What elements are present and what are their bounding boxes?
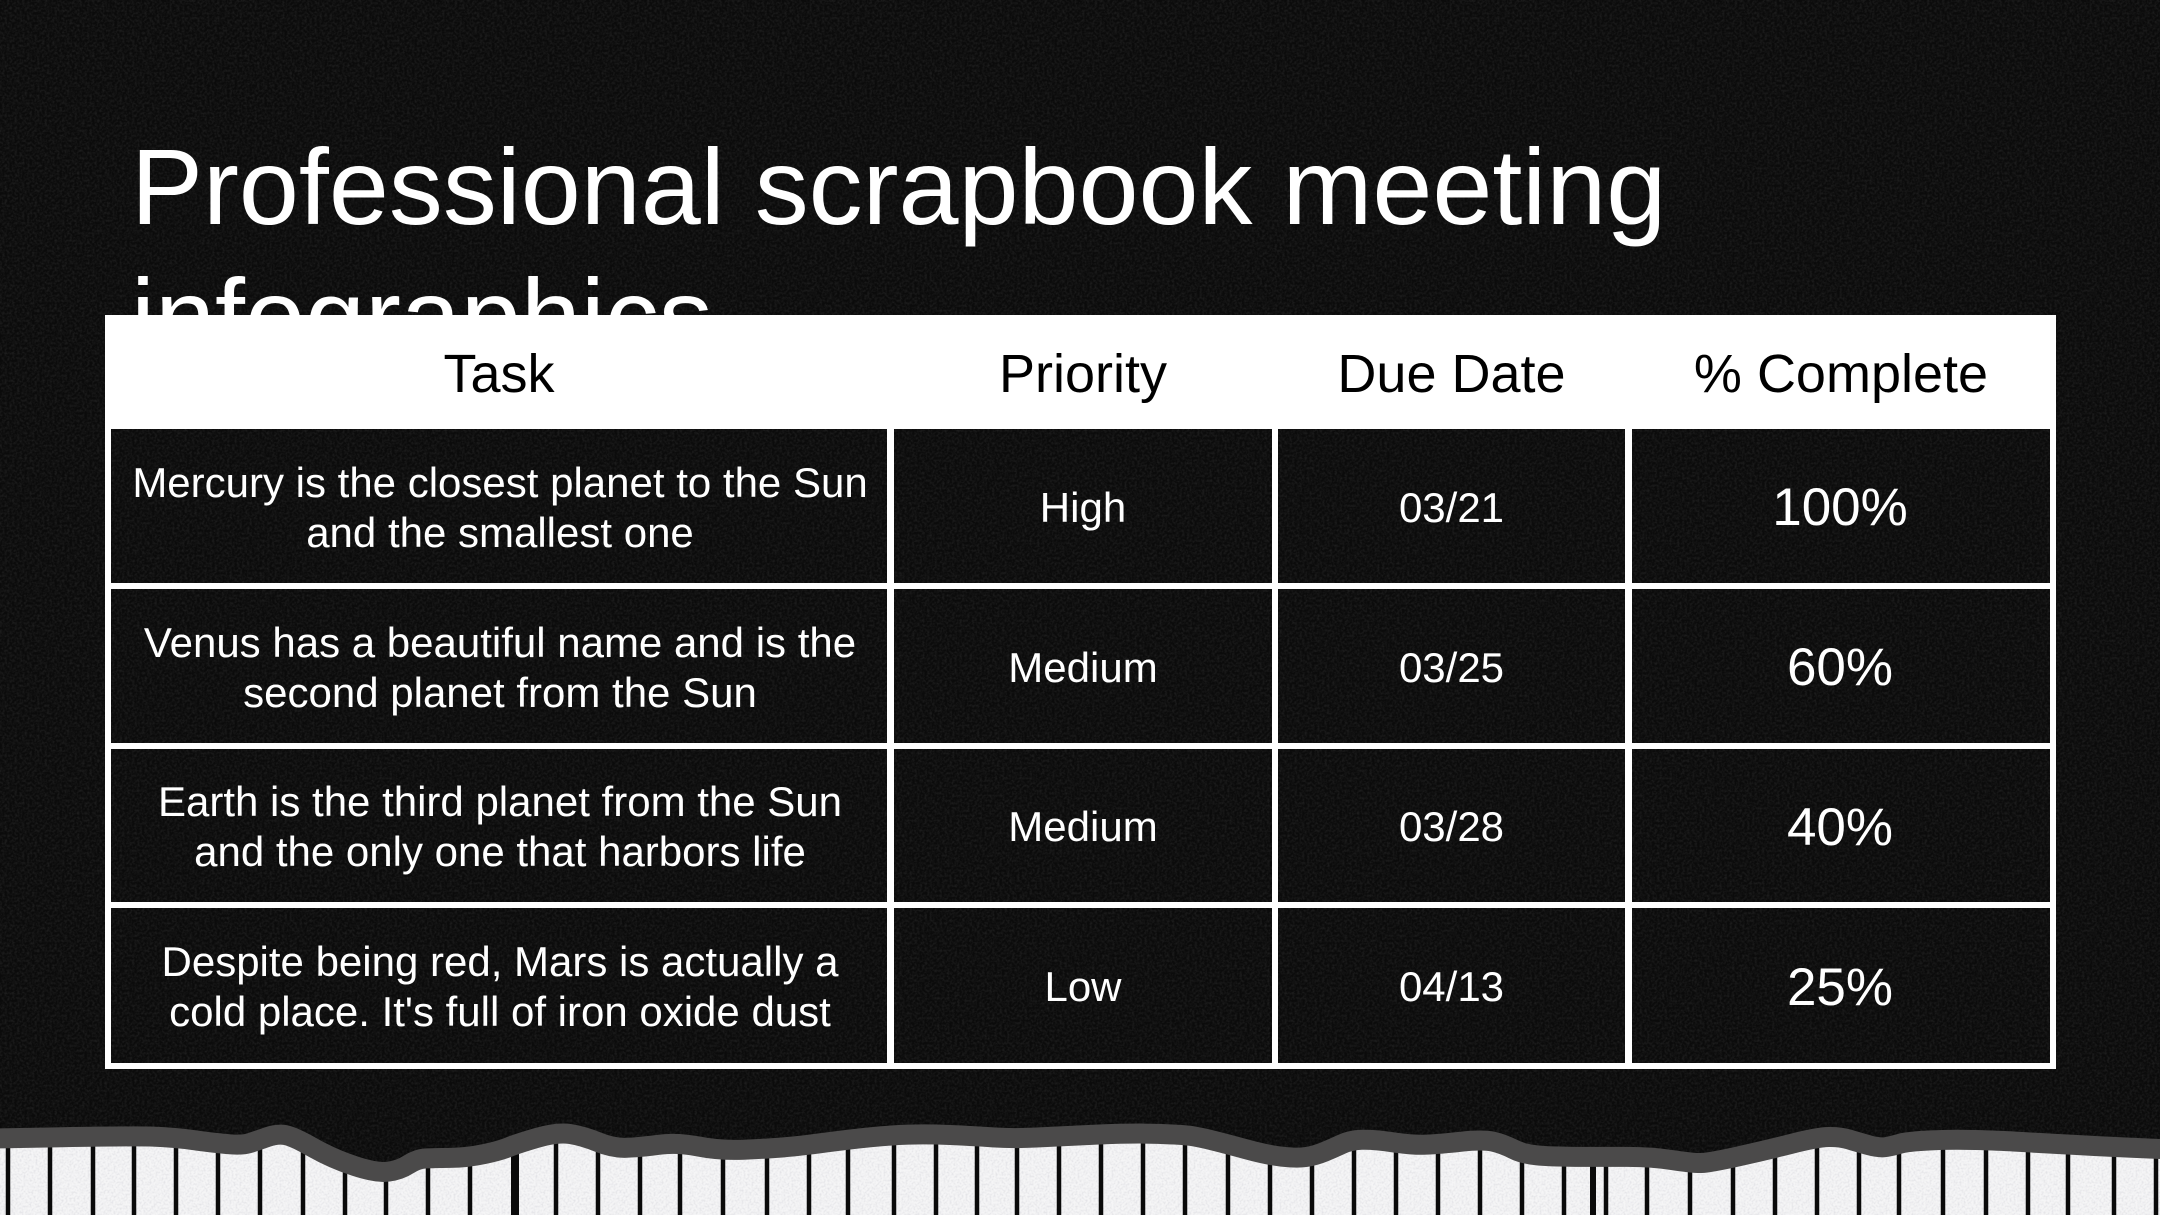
row 3 task <box>158 778 842 875</box>
row 3 task: Earth is the third planet from the Sun <box>158 778 842 825</box>
header: Task: Task <box>443 344 555 404</box>
row 4 task: cold place. It's full of iron oxide dust <box>169 988 831 1035</box>
row 1 task: and the smallest one <box>306 508 694 556</box>
row 4 priority: Low <box>1044 963 1122 1010</box>
row 1 percent complete: 100% <box>1772 478 1908 536</box>
row 3 task: and the only one that harbors life <box>194 828 806 875</box>
column and row dividers <box>111 429 2050 1063</box>
row 4 task: Despite being red, Mars is actually a <box>162 938 838 985</box>
row 2 task: Venus has a beautiful name and is the <box>144 618 856 666</box>
row 3 priority: Medium <box>1008 803 1158 850</box>
torn paper strip with ruled lines <box>0 1124 2160 1215</box>
row 1 task: Mercury is the closest planet to the Sun <box>132 458 868 506</box>
row 2 task: second planet from the Sun <box>243 668 757 716</box>
row 3 percent complete: 40% <box>1787 798 1893 856</box>
row 4 percent complete: 25% <box>1787 958 1893 1016</box>
row 2 task <box>144 618 856 716</box>
row 2 priority: Medium <box>1008 644 1158 691</box>
white paper with ruled lines <box>0 1144 2160 1215</box>
row 4 task <box>162 938 838 1035</box>
torn edge band <box>0 1133 2160 1172</box>
row 1 due date: 03/21 <box>1399 484 1504 531</box>
row 4 due date: 04/13 <box>1399 963 1504 1010</box>
task table <box>105 315 2056 1069</box>
header: Priority: Priority <box>999 344 1167 404</box>
row 1 task <box>132 458 868 556</box>
table header background <box>111 321 2050 429</box>
row 2 due date: 03/25 <box>1399 644 1504 690</box>
title: Professional scrapbook meeting infographics <box>131 126 1666 377</box>
row 1 priority: High <box>1040 484 1126 531</box>
row 3 due date: 03/28 <box>1399 803 1504 850</box>
header: Due Date: Due Date <box>1337 344 1566 404</box>
row 2 percent complete: 60% <box>1787 638 1893 696</box>
header: % Complete: % Complete <box>1694 344 1988 404</box>
